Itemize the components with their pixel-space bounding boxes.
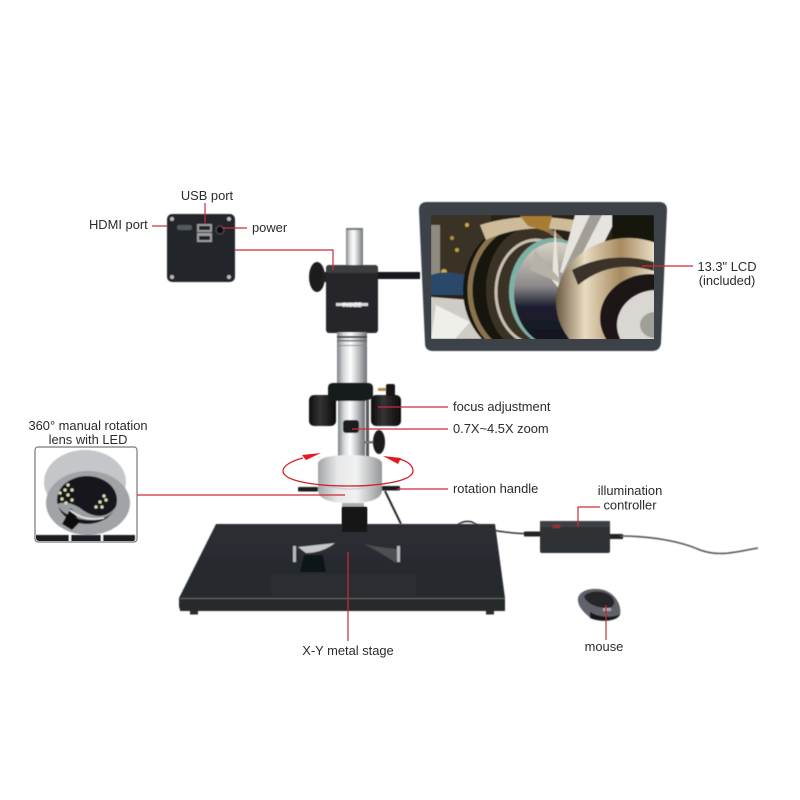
label: 13.3 inch LCD: (included) [699,273,755,288]
label: mouse: mouse [585,639,623,654]
label: zoom range: 0.7X~4.5X zoom [453,421,549,436]
rotating LED housing with handles [298,455,401,532]
label: HDMI port: HDMI port [89,217,148,232]
microscope head with eyepiece and knob [309,228,420,333]
label: 13.3 inch LCD: 13.3" LCD [697,259,757,274]
upper lens column [337,332,367,387]
microscope head with eyepiece and knob: INSIZE [342,303,362,309]
inset: lens with LED [35,447,137,542]
label: rotation handle: rotation handle [453,481,538,496]
LCD screen image [431,215,654,339]
label: focus adjustment: focus adjustment [453,399,551,414]
X-Y metal stage [179,507,505,614]
focus knobs and lower column [309,383,401,460]
label: USB port: USB port [181,188,234,203]
label: illumination controller: illumination [598,483,662,498]
label: 360 degree manual rotation lens: 360° manual rotation [28,418,148,433]
LCD monitor [418,201,668,352]
computer mouse [578,589,620,621]
label: X-Y metal stage: X-Y metal stage [302,643,394,658]
callout lines [137,203,693,641]
label: illumination controller: controller [603,498,657,512]
rotation arrows [283,453,413,486]
illumination controller with cables [458,521,758,554]
camera box with ports [167,214,235,282]
label: power: power [252,220,288,235]
label: 360 degree manual rotation lens: lens with LED [49,432,127,447]
